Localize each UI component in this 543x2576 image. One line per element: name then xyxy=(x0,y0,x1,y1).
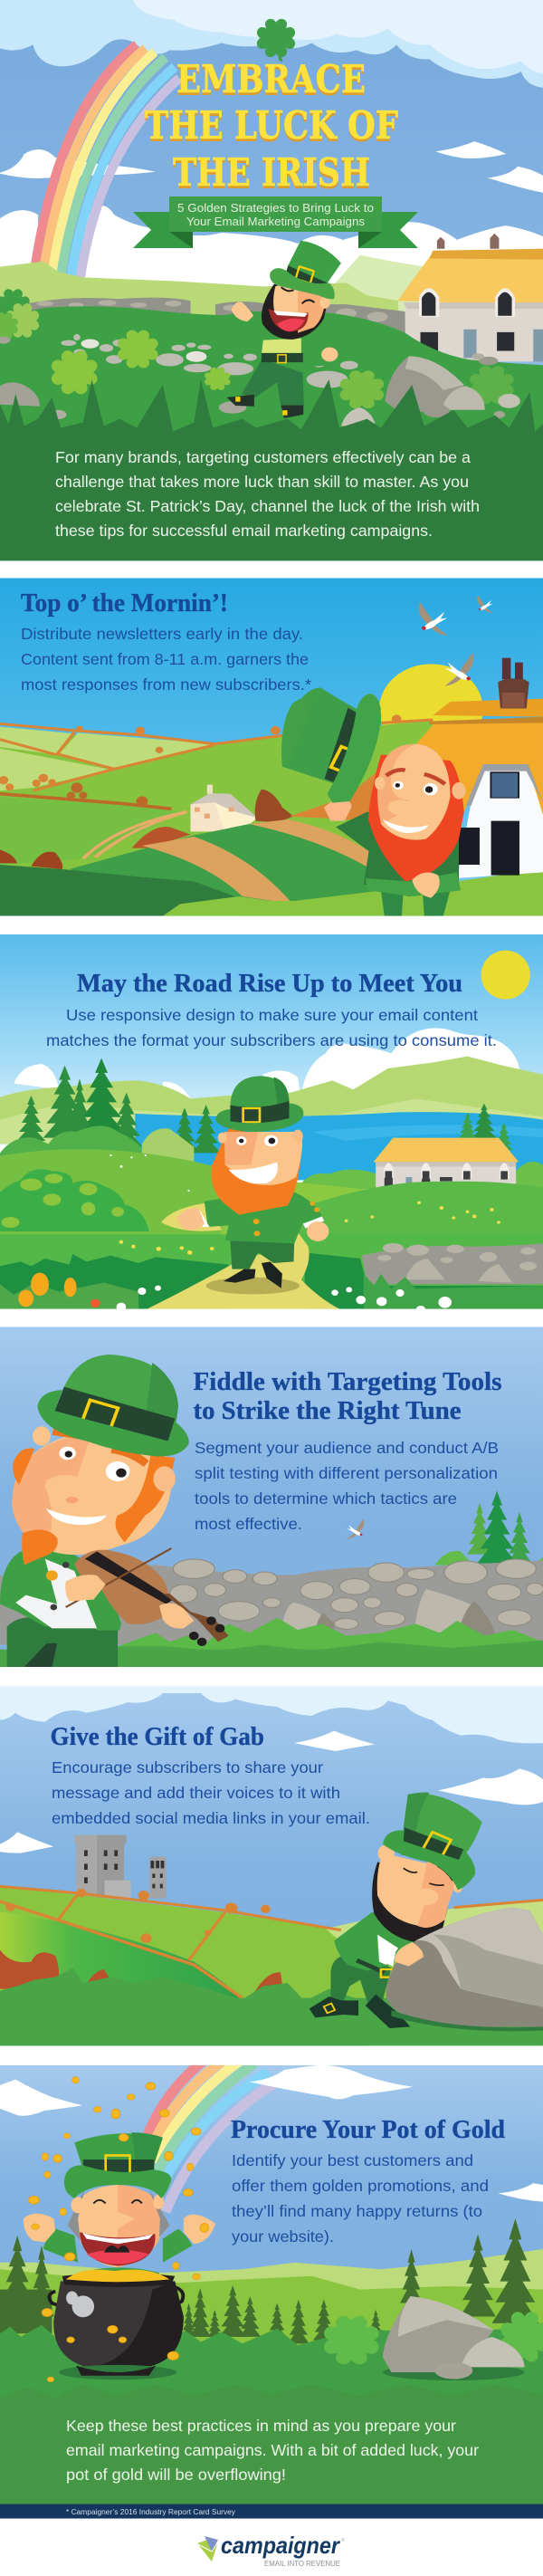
title: THE LUCK OF xyxy=(145,106,398,150)
intro text: challenge that takes more luck than skill to master. As you xyxy=(55,473,469,491)
closing text xyxy=(66,2417,479,2484)
subtitle ribbon xyxy=(133,196,418,248)
body text: Content sent from 8-11 a.m. garners the xyxy=(21,650,309,668)
rocks xyxy=(383,2296,525,2380)
rocks xyxy=(0,337,520,426)
castle xyxy=(74,1835,167,1899)
yellow road xyxy=(148,1202,339,1309)
campaigner logo: ® xyxy=(341,2537,345,2543)
blarney stone xyxy=(386,1908,543,2031)
grass xyxy=(118,1617,539,1650)
heading: Top o’ the Mornin’! xyxy=(21,589,228,618)
heading xyxy=(194,1368,502,1425)
body text: embedded social media links in your email. xyxy=(52,1809,370,1827)
leprechaun: kissing the stone xyxy=(310,1792,482,2028)
swallow xyxy=(347,1519,364,1539)
closing text: pot of gold will be overflowing! xyxy=(66,2466,286,2484)
body text xyxy=(21,625,311,694)
thatched cottage xyxy=(412,658,543,878)
closing text: email marketing campaigns. With a bit of added luck, your xyxy=(66,2441,479,2459)
subtitle ribbon: 5 Golden Strategies to Bring Luck to xyxy=(177,202,374,215)
heading: Procure Your Pot of Gold xyxy=(231,2116,505,2144)
pot of gold and leprechaun xyxy=(24,2132,215,2380)
stone wall xyxy=(362,1243,543,1284)
heading: Fiddle with Targeting Tools xyxy=(194,1368,502,1396)
title: EMBRACE xyxy=(176,57,366,101)
rainbow xyxy=(33,44,179,277)
body text: they’ll find many happy returns (to xyxy=(232,2202,482,2220)
heading: May the Road Rise Up to Meet You xyxy=(77,970,462,998)
scene: lake and road xyxy=(0,934,543,1314)
cottage xyxy=(397,234,543,361)
intro text: these tips for successful email marketing campaigns. xyxy=(55,522,433,540)
body text: Use responsive design to make sure your email content xyxy=(66,1006,478,1024)
body text: Encourage subscribers to share your xyxy=(52,1758,323,1776)
intro text: celebrate St. Patrick’s Day, channel the luck of the Irish with xyxy=(55,497,480,515)
campaigner logo xyxy=(197,2532,345,2568)
footnote bar: * Campaigner’s 2016 Industry Report Card Survey xyxy=(66,2508,235,2516)
scene: farmland and cottage xyxy=(0,578,543,916)
icon: four-leaf clover xyxy=(254,16,298,62)
title: THE LUCK OF xyxy=(145,103,398,148)
title: EMBRACE xyxy=(176,60,366,104)
body text xyxy=(46,1006,497,1049)
campaigner logo: campaigner xyxy=(221,2532,341,2559)
foreground grass xyxy=(0,379,543,561)
body text xyxy=(52,1758,370,1827)
clovers xyxy=(320,2309,543,2367)
title xyxy=(145,57,398,197)
intro illustration xyxy=(0,0,543,561)
body text: Identify your best customers and xyxy=(232,2151,473,2169)
scene: stone wall and fiddler xyxy=(0,1326,543,1667)
body text xyxy=(232,2151,489,2246)
leprechaun: laughing, black beard xyxy=(227,241,341,418)
body text xyxy=(195,1439,499,1533)
leprechaun: tipping hat, red beard xyxy=(281,687,466,916)
heading: Give the Gift of Gab xyxy=(51,1723,264,1751)
body text: tools to determine which tactics are xyxy=(195,1489,457,1508)
subtitle ribbon: Your Email Marketing Campaigns xyxy=(186,215,365,228)
body text: Segment your audience and conduct A/B xyxy=(195,1439,499,1457)
body text: most responses from new subscribers.* xyxy=(21,675,311,694)
scene: pot of gold xyxy=(0,2062,543,2505)
panel: fiddle with targeting tools xyxy=(0,1326,543,1667)
distant farmhouse xyxy=(190,785,258,831)
intro text: For many brands, targeting customers effectively can be a xyxy=(55,448,471,466)
body text: your website). xyxy=(232,2227,334,2246)
footnote bar xyxy=(0,2504,543,2519)
body text: split testing with different personalization xyxy=(195,1464,498,1482)
panel: intro xyxy=(0,0,543,561)
distant house xyxy=(373,1138,519,1192)
body text: most effective. xyxy=(195,1515,302,1533)
pine trees xyxy=(17,1058,513,1153)
body text: message and add their voices to it with xyxy=(52,1784,340,1802)
heading: to Strike the Right Tune xyxy=(194,1397,462,1425)
flower dots xyxy=(119,1202,500,1255)
icon: envelope xyxy=(197,2536,218,2562)
leprechaun: walking, orange beard xyxy=(177,1076,329,1288)
hedges xyxy=(0,720,433,809)
bush xyxy=(0,1169,149,1231)
title: THE IRISH xyxy=(173,153,370,197)
panel: give the gift of gab xyxy=(0,1687,543,2045)
hedges xyxy=(0,1886,543,1998)
scene: castle and blarney stone xyxy=(0,1687,543,2045)
panel: top o' the mornin' xyxy=(0,578,543,916)
campaigner logo: EMAIL INTO REVENUE xyxy=(264,2559,340,2568)
clovers xyxy=(0,287,517,411)
panel: may the road rise xyxy=(0,934,543,1314)
intro text xyxy=(55,448,480,540)
body text: Distribute newsletters early in the day. xyxy=(21,625,303,643)
gold coins xyxy=(29,2077,209,2382)
tree line xyxy=(0,2218,538,2343)
pine trees xyxy=(434,1491,543,1566)
flowers xyxy=(18,1273,452,1309)
stone wall xyxy=(0,1559,543,1645)
fiddle xyxy=(66,1548,229,1646)
stepping stones xyxy=(61,334,358,388)
closing text: Keep these best practices in mind as you prepare your xyxy=(66,2417,456,2435)
rainbow xyxy=(146,2062,282,2212)
leprechaun: fiddler xyxy=(0,1355,229,1667)
panel: procure your pot of gold xyxy=(0,2062,543,2505)
body text: offer them golden promotions, and xyxy=(232,2177,489,2195)
title: THE IRISH xyxy=(173,150,370,195)
birds xyxy=(419,595,493,685)
body text: matches the format your subscribers are using to consume it. xyxy=(46,1031,497,1049)
